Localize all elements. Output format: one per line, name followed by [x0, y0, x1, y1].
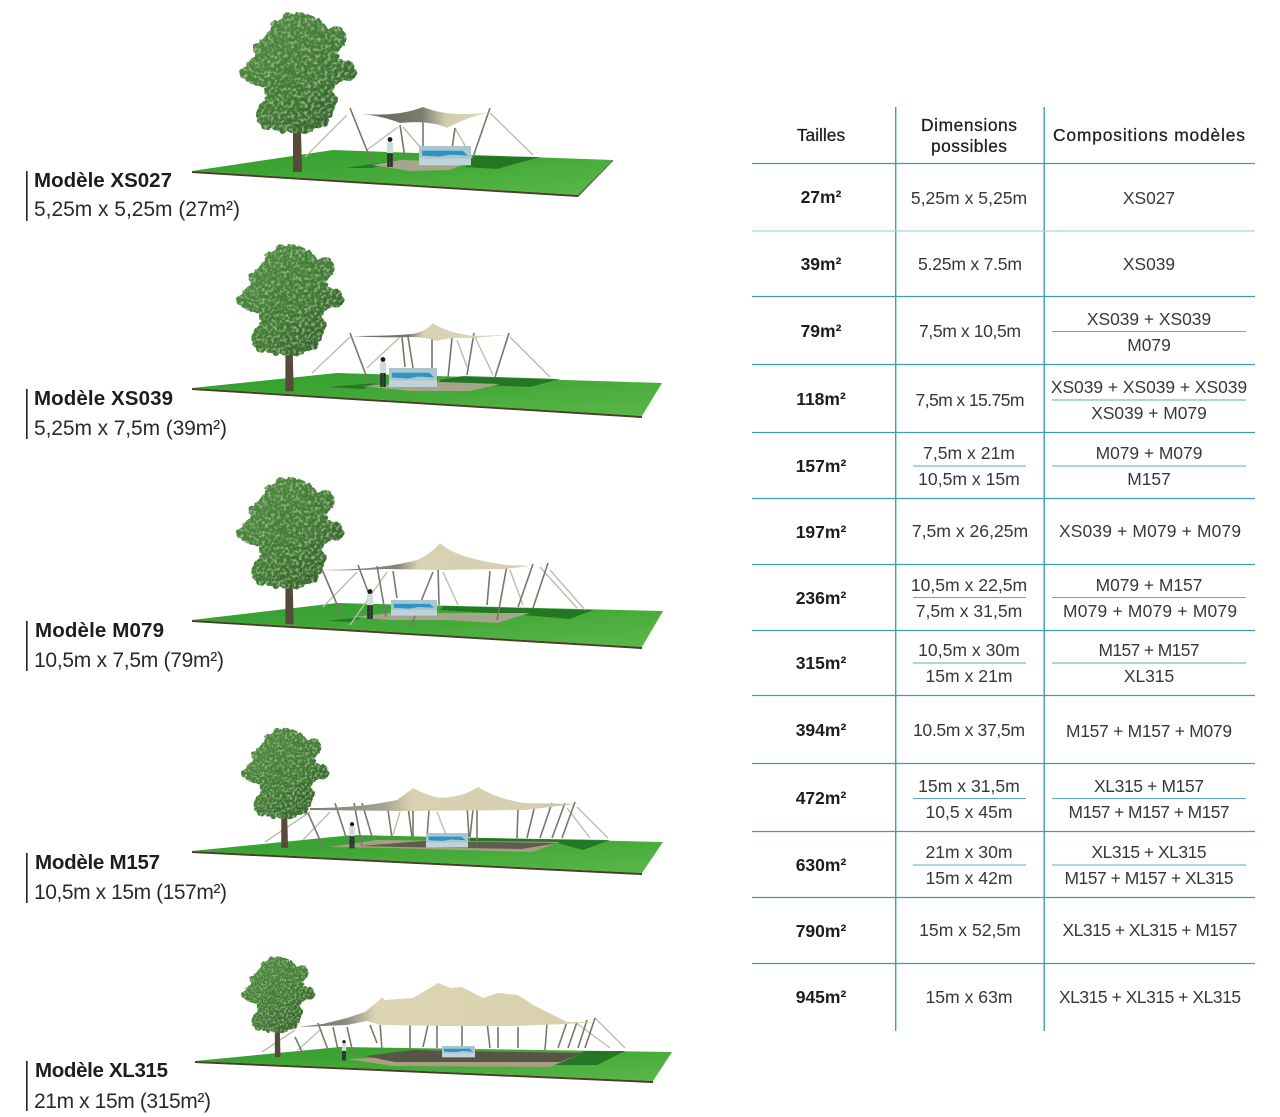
person	[380, 357, 386, 387]
row 315m²: 10,5m x 30m	[918, 640, 1020, 660]
row 197m²: XS039 + M079 + M079	[1059, 521, 1241, 541]
row 157m²: M079 + M079	[1096, 443, 1202, 463]
row 945m²: XL315 + XL315 + XL315	[1059, 987, 1241, 1007]
ground: lawn	[192, 603, 663, 649]
label M079: 10,5m x 7,5m (79m²)	[34, 649, 224, 672]
row 790m²	[796, 920, 1238, 941]
table header: Compositions modèles	[1053, 125, 1245, 145]
row 630m²: 15m x 42m	[925, 868, 1013, 888]
row 472m²: M157 + M157 + M157	[1068, 802, 1230, 822]
row 157m²: 7,5m x 21m	[923, 443, 1015, 463]
row 472m²: XL315 + M157	[1094, 776, 1204, 796]
row 394m²: 10.5m x 37,5m	[913, 720, 1025, 740]
row 315m²: XL315	[1124, 666, 1174, 686]
ground: lawn	[192, 835, 663, 875]
banner	[389, 368, 437, 387]
row 79m²: M079	[1127, 335, 1171, 355]
table header: Tailles	[797, 125, 845, 145]
row 39m²: 39m²	[801, 254, 842, 274]
row 945m²: 945m²	[796, 987, 846, 1007]
row 79m²	[801, 309, 1246, 355]
row 630m²: M157 + M157 + XL315	[1064, 868, 1234, 888]
panel: model M079	[26, 477, 663, 672]
row 197m²: 197m²	[796, 522, 846, 542]
row 315m²	[796, 640, 1246, 686]
row 472m²: 15m x 31,5m	[918, 776, 1020, 796]
label XS027	[26, 169, 240, 221]
row 630m²: 630m²	[796, 855, 846, 875]
row 118m²: XS039 + XS039 + XS039	[1051, 377, 1247, 397]
panel: model XS039	[26, 244, 662, 440]
row 157m²	[796, 443, 1246, 489]
row 79m²: 7,5m x 10,5m	[919, 321, 1021, 341]
person	[387, 137, 393, 167]
label XL315: 21m x 15m (315m²)	[34, 1090, 211, 1113]
row 945m²	[796, 987, 1241, 1007]
row 236m²: 7,5m x 31,5m	[916, 601, 1022, 621]
banner	[419, 146, 471, 165]
banner	[442, 1046, 475, 1057]
tent XS039	[312, 323, 550, 383]
row 315m²: 315m²	[796, 653, 846, 673]
row 315m²: M157 + M157	[1098, 640, 1200, 660]
label XS027: Modèle XS027	[34, 169, 172, 192]
row 79m²: 79m²	[801, 321, 842, 341]
row 472m²: 10,5 x 45m	[925, 802, 1013, 822]
label XS039: Modèle XS039	[34, 387, 173, 410]
ground: lawn	[195, 1047, 672, 1083]
row 27m²	[801, 187, 1175, 208]
row 118m²: 7,5m x 15.75m	[916, 390, 1024, 410]
tree	[238, 477, 344, 624]
row 118m²: 118m²	[796, 389, 846, 409]
row 39m²: 5.25m x 7.5m	[918, 254, 1022, 274]
label XS039: 5,25m x 7,5m (39m²)	[34, 417, 227, 440]
label M157: Modèle M157	[35, 851, 160, 874]
row 157m²: M157	[1127, 469, 1171, 489]
tree	[243, 956, 315, 1057]
panel: model XL315	[26, 956, 672, 1113]
row 394m²	[796, 720, 1232, 741]
table header	[797, 115, 1245, 156]
row 630m²: 21m x 30m	[925, 842, 1013, 862]
row 472m²: 472m²	[796, 788, 846, 808]
row 236m²: M079 + M079 + M079	[1063, 601, 1237, 621]
label XL315: Modèle XL315	[35, 1059, 168, 1082]
row 945m²: 15m x 63m	[925, 987, 1013, 1007]
label M157: 10,5m x 15m (157m²)	[34, 881, 227, 904]
row 118m²: XS039 + M079	[1091, 403, 1207, 423]
tree	[238, 244, 344, 391]
row 630m²: XL315 + XL315	[1092, 842, 1206, 862]
panel: model M157	[26, 728, 663, 904]
row 27m²: 5,25m x 5,25m	[911, 188, 1027, 208]
row 394m²: 394m²	[796, 720, 846, 740]
table header: Dimensions	[921, 115, 1017, 135]
label XL315	[26, 1059, 211, 1113]
person	[367, 589, 373, 619]
row 157m²: 10,5m x 15m	[918, 469, 1020, 489]
table header: possibles	[931, 136, 1007, 156]
label XS027: 5,25m x 5,25m (27m²)	[34, 198, 240, 221]
row 315m²: 15m x 21m	[925, 666, 1013, 686]
table: sizes, dimensions, compositions	[752, 107, 1255, 1031]
tent M079	[321, 543, 585, 628]
row 236m²: M079 + M157	[1096, 575, 1202, 595]
row 394m²: M157 + M157 + M079	[1066, 721, 1232, 741]
banner	[391, 600, 437, 616]
row 118m²	[796, 377, 1247, 423]
tent XS027	[305, 107, 533, 165]
tree	[242, 12, 357, 172]
tent M157	[265, 787, 608, 847]
row 472m²	[796, 776, 1246, 822]
row 790m²: XL315 + XL315 + M157	[1062, 920, 1238, 940]
row 790m²: 790m²	[796, 921, 846, 941]
person	[349, 822, 355, 848]
label XS039	[26, 387, 227, 440]
row 236m²	[796, 575, 1246, 621]
ground: lawn	[192, 373, 662, 418]
row 236m²: 236m²	[796, 588, 846, 608]
row 790m²: 15m x 52,5m	[919, 920, 1021, 940]
row 236m²: 10,5m x 22,5m	[911, 575, 1027, 595]
banner	[426, 833, 468, 847]
row 197m²: 7,5m x 26,25m	[912, 521, 1028, 541]
row 197m²	[796, 521, 1241, 542]
row 27m²: XS027	[1123, 188, 1175, 208]
panel: model XS027	[26, 12, 613, 221]
person	[342, 1040, 346, 1060]
label M079	[26, 619, 224, 672]
ground: lawn	[192, 150, 613, 197]
label M079: Modèle M079	[35, 619, 164, 642]
row 39m²	[801, 254, 1175, 274]
tree	[243, 728, 329, 848]
row 157m²: 157m²	[796, 456, 846, 476]
row 79m²: XS039 + XS039	[1087, 309, 1211, 329]
tent XL315	[262, 983, 625, 1058]
row 630m²	[796, 842, 1246, 888]
label M157	[26, 851, 227, 904]
row 39m²: XS039	[1123, 254, 1175, 274]
row 27m²: 27m²	[801, 187, 842, 207]
